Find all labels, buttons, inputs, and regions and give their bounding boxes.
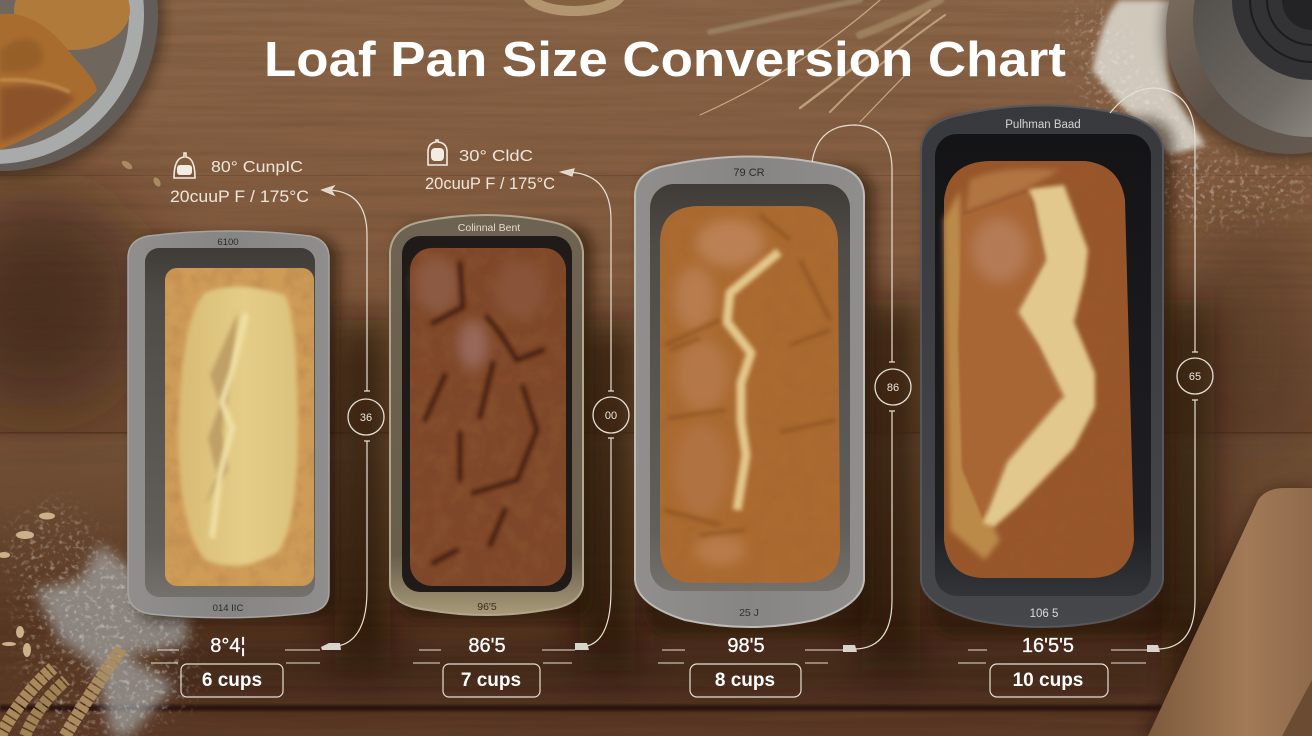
pan 1 rim label: 6100 (217, 237, 239, 248)
arrow: pan 4 depth (1110, 88, 1198, 652)
icon: oven (174, 153, 195, 178)
temperature text: 20cuuP F / 175°C (425, 175, 555, 193)
wheat stalks, bottom left (0, 648, 122, 736)
capacity (181, 664, 283, 697)
dimension: 16'5'5 (1022, 635, 1074, 657)
capacity (443, 664, 540, 697)
panel: 7 cup loaf pan (390, 215, 593, 621)
title: Loaf Pan Size Conversion Chart (264, 33, 1066, 87)
callout: oven temperature for 6 cup pan (170, 153, 309, 206)
wheat stalks, top (700, 0, 945, 122)
panel: 6 cup loaf pan (128, 231, 339, 622)
seeds on table (0, 159, 162, 657)
dimension: 98'5 (727, 635, 765, 657)
icon: oven (428, 140, 447, 165)
pan 3 rim label: 79 CR (733, 167, 765, 179)
depth badge: pan 1 (348, 399, 384, 435)
flour pile, bottom left (2, 498, 207, 736)
flour pile, top right (1040, 0, 1312, 240)
panel: 10 cup Pullman loaf pan (921, 106, 1174, 638)
temperature text: 20cuuP F / 175°C (170, 188, 309, 206)
pan 3 bottom label: 25 J (739, 607, 759, 619)
size label: pan 1 (151, 635, 320, 697)
size label: pan 3 (658, 635, 845, 697)
pan 2 bottom label: 96'5 (477, 601, 497, 613)
size label: pan 4 (958, 635, 1148, 697)
cutting board, bottom right (1140, 488, 1312, 736)
arrow: pan 1 depth (321, 186, 370, 650)
bowl with bread rolls, top left (0, 0, 164, 178)
panel: 8 cup loaf pan (635, 156, 874, 636)
oven note text: 30° CldC (459, 148, 533, 165)
dimension: 86'5 (468, 635, 506, 657)
small roll (14, 0, 130, 50)
loaf: dark (410, 248, 566, 586)
depth badge: pan 3: 86 (887, 382, 899, 394)
capacity: 8 cups (715, 670, 775, 691)
metal canister, top right (1162, 0, 1312, 160)
depth badge: pan 2 (593, 397, 629, 433)
pan 4 bottom label: 106 5 (1030, 608, 1058, 620)
dimension: 8°4¦ (210, 635, 246, 657)
arrow: pan 3 depth (812, 125, 895, 652)
pan 4 rim label: Pulhman Baad (1005, 119, 1081, 131)
callout: oven temperature for 7 cup pan (425, 140, 555, 193)
oven note text: 80° CunpIC (211, 159, 303, 176)
size label: pan 2 (413, 635, 575, 697)
loaf: golden (655, 200, 845, 590)
capacity (990, 664, 1108, 697)
depth badge: pan 2: 00 (605, 410, 617, 422)
capacity: 6 cups (202, 670, 262, 691)
loaf: golden-brown (938, 155, 1138, 583)
capacity (690, 664, 801, 697)
pan 2 rim label: Colinnal Bent (458, 222, 520, 234)
capacity: 10 cups (1013, 670, 1083, 691)
depth badge: pan 1: 36 (360, 412, 372, 424)
loaf: pale (165, 268, 314, 586)
pan 1 bottom label: 014 IIC (213, 603, 243, 614)
small wooden bowl, top centre (522, 0, 626, 16)
depth badge: pan 4 (1177, 358, 1213, 394)
big roll (0, 14, 96, 150)
depth badge: pan 4: 65 (1189, 371, 1201, 383)
capacity: 7 cups (461, 670, 521, 691)
depth badge: pan 3 (875, 369, 911, 405)
arrow: pan 2 depth (561, 169, 614, 650)
